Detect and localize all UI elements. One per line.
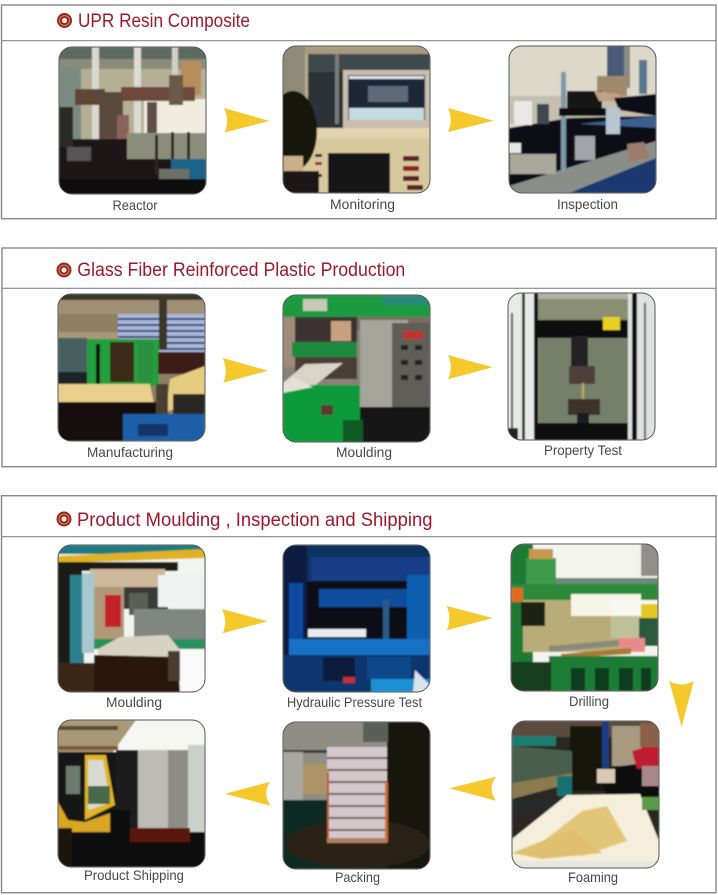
panel: UPR Resin Composite [2, 5, 716, 219]
label: Hydraulic Pressure Test: Hydraulic Pressure Test [287, 694, 422, 710]
photo: reactor [59, 47, 206, 194]
photo: hydraulic pressure test [283, 545, 430, 692]
photo: monitoring [269, 46, 430, 193]
arrow: moulding to property test [448, 355, 493, 379]
arrow: drilling to foaming [669, 681, 694, 727]
label: Drilling: Drilling [569, 693, 609, 709]
label: Manufacturing: Manufacturing [87, 444, 173, 460]
arrow: monitoring to inspection [448, 108, 494, 132]
icon: ring bullet [56, 512, 72, 526]
label: Foaming: Foaming [568, 869, 618, 885]
arrow: hydraulic pressure test to drilling [447, 606, 493, 630]
arrow: manufacturing to moulding [223, 358, 268, 383]
arrow: packing to product shipping [225, 782, 271, 806]
arrow: reactor to monitoring [224, 108, 270, 132]
label: Moulding: Moulding [336, 444, 392, 460]
label: Packing: Packing [335, 869, 380, 885]
icon: ring bullet [56, 262, 72, 278]
photo: packing [283, 722, 430, 869]
photo: product shipping [58, 720, 205, 867]
heading: UPR Resin Composite: UPR Resin Composite [78, 11, 250, 32]
photo: drilling [511, 544, 658, 691]
arrow: foaming to packing [449, 777, 496, 801]
panel: Glass Fiber Reinforced Plastic Production [2, 248, 716, 467]
photo: moulding [58, 545, 205, 692]
label: Property Test: Property Test [544, 442, 622, 458]
label: Inspection: Inspection [557, 196, 618, 212]
heading: Glass Fiber Reinforced Plastic Production: Glass Fiber Reinforced Plastic Production [77, 260, 405, 281]
heading: Product Moulding, Inspection and Shipping: Product Moulding , Inspection and Shipping [77, 510, 432, 531]
label: Reactor: Reactor [112, 197, 158, 213]
label: Monitoring: Monitoring [330, 196, 395, 212]
photo: manufacturing [58, 294, 205, 441]
label: Moulding: Moulding [106, 694, 162, 710]
photo: inspection [509, 46, 656, 193]
photo: moulding press [283, 295, 430, 442]
arrow: moulding to hydraulic pressure test [222, 609, 268, 633]
label: Product Shipping: Product Shipping [84, 867, 184, 883]
panel: Product Moulding, Inspection and Shipping [2, 496, 716, 893]
photo: property test [508, 293, 655, 440]
photo: foaming [512, 721, 659, 868]
icon: ring bullet [57, 13, 72, 28]
